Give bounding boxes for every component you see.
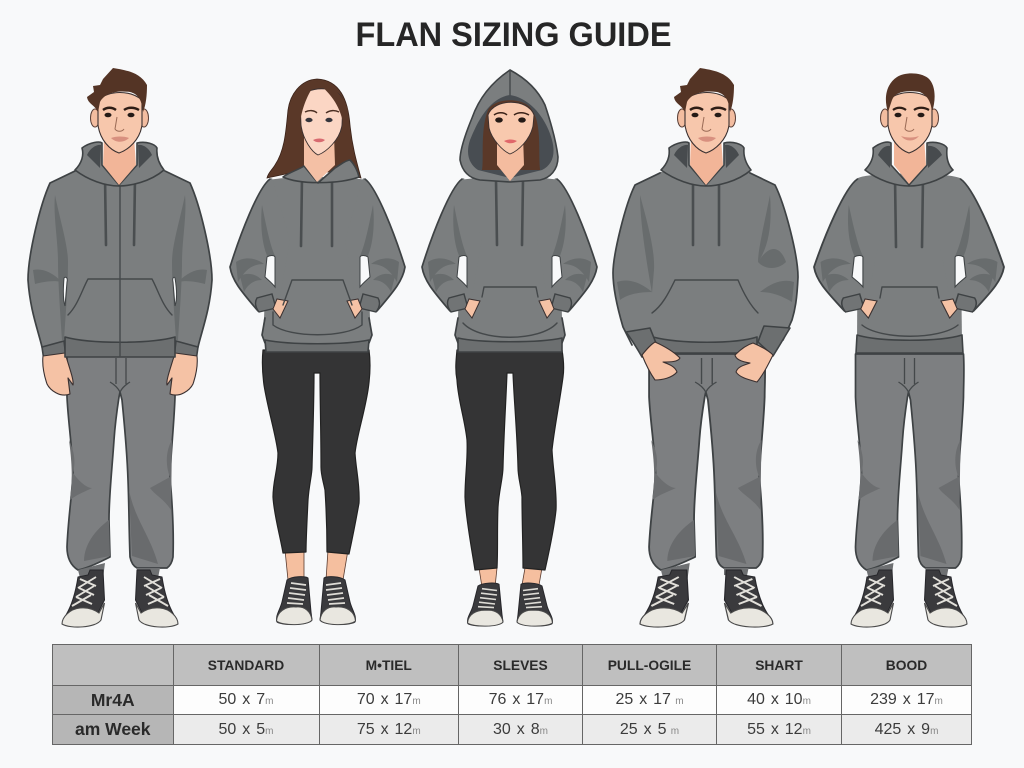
sizing table: Mr4A — [91, 690, 135, 710]
sizing table: 25 x 17 m — [615, 691, 684, 708]
sizing table: STANDARD — [208, 658, 284, 672]
title: FLAN SIZING GUIDE — [356, 16, 672, 54]
figure: woman with hood up and leggings — [422, 70, 597, 626]
figure: woman in hoodie and leggings — [230, 79, 405, 625]
sizing table — [52, 644, 972, 745]
sizing table: 75 x 12m — [357, 720, 421, 738]
sizing table: 425 x 9m — [875, 720, 938, 738]
sizing table: 25 x 5 m — [620, 720, 679, 738]
figure: man in pullover hoodie with hands at thighs — [613, 68, 798, 627]
sizing table: SLEVES — [493, 658, 548, 672]
sizing table: 30 x 8m — [493, 720, 548, 738]
sizing table: 50 x 7m — [219, 691, 273, 708]
sizing table: M•TIEL — [366, 658, 412, 672]
sizing table: 239 x 17m — [870, 691, 943, 708]
sizing table: SHART — [755, 658, 803, 672]
sizing table: PULL-OGILE — [608, 658, 691, 672]
figure: man in pullover hoodie with hands in pocket — [814, 73, 1004, 627]
sizing table: 55 x 12m — [747, 720, 811, 738]
sizing table: 40 x 10m — [747, 691, 811, 708]
sizing table: am Week — [75, 719, 151, 739]
sizing table: 76 x 17m — [489, 691, 552, 708]
figure: man in zip hoodie and joggers — [28, 68, 212, 627]
sizing table: BOOD — [886, 658, 927, 672]
sizing table: 70 x 17m — [357, 691, 421, 708]
sizing table: 50 x 5m — [219, 720, 273, 738]
